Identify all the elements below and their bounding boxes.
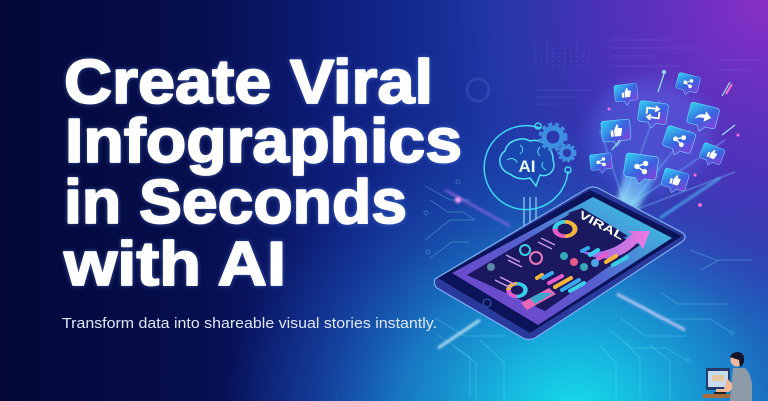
sparks bbox=[608, 70, 740, 207]
title text bbox=[63, 48, 462, 299]
thumb bubble large bbox=[601, 119, 632, 147]
thumb bubble right bbox=[697, 142, 726, 169]
share bubble mid bbox=[660, 125, 696, 159]
bar chart middle bbox=[537, 273, 584, 291]
thumb bubble low bbox=[659, 168, 690, 196]
title text: with AI bbox=[63, 230, 286, 299]
title glow: in Seconds bbox=[64, 168, 407, 237]
title glow: with AI bbox=[63, 230, 286, 299]
desk bbox=[703, 394, 731, 398]
monitor bbox=[706, 368, 730, 390]
subtitle: Transform data into shareable visual stories instantly. bbox=[62, 316, 437, 332]
viral banner bbox=[568, 208, 628, 243]
light streaks bbox=[438, 178, 720, 348]
social bubbles bbox=[589, 72, 726, 196]
tablet screen bbox=[452, 197, 672, 325]
AI label: AI bbox=[518, 157, 536, 176]
bar chart right bbox=[582, 248, 627, 265]
viral banner: VIRAL bbox=[577, 209, 626, 243]
arm bbox=[716, 378, 732, 392]
donut chart top bbox=[555, 222, 575, 236]
tablet body bbox=[434, 187, 685, 340]
home button bbox=[483, 299, 491, 307]
donut chart bottom bbox=[508, 284, 526, 296]
share bubble large bbox=[622, 153, 659, 186]
share bubble small bbox=[589, 153, 613, 175]
forward bubble bbox=[685, 102, 720, 135]
brain outline bbox=[500, 139, 554, 186]
share bubble top bbox=[674, 72, 701, 97]
title bbox=[63, 48, 462, 299]
title text: in Seconds bbox=[64, 168, 407, 237]
circuit traces bbox=[424, 180, 752, 401]
title glow: Create Viral bbox=[64, 48, 433, 117]
faint dashboard texture, upper right bbox=[467, 36, 760, 104]
glow behind bubbles bbox=[590, 80, 710, 190]
indicator dots bbox=[487, 245, 599, 271]
text lines bbox=[495, 238, 555, 288]
tablet bbox=[434, 187, 685, 340]
torso bbox=[730, 368, 752, 401]
picture thumbnail bbox=[521, 288, 556, 310]
beams rising from the tablet bbox=[524, 100, 735, 270]
AI brain icon bbox=[484, 123, 576, 210]
thumb bubble bbox=[614, 83, 639, 106]
title glow: Infographics bbox=[65, 107, 462, 176]
title text: Infographics bbox=[65, 107, 462, 176]
growth arrow bbox=[580, 231, 650, 259]
person at computer bbox=[703, 352, 752, 401]
dashboard panel bbox=[467, 214, 640, 311]
title text: Create Viral bbox=[64, 48, 433, 117]
repost bubble bbox=[637, 100, 669, 130]
title glow bbox=[63, 48, 462, 299]
head bbox=[730, 354, 744, 366]
gears bbox=[544, 128, 562, 146]
